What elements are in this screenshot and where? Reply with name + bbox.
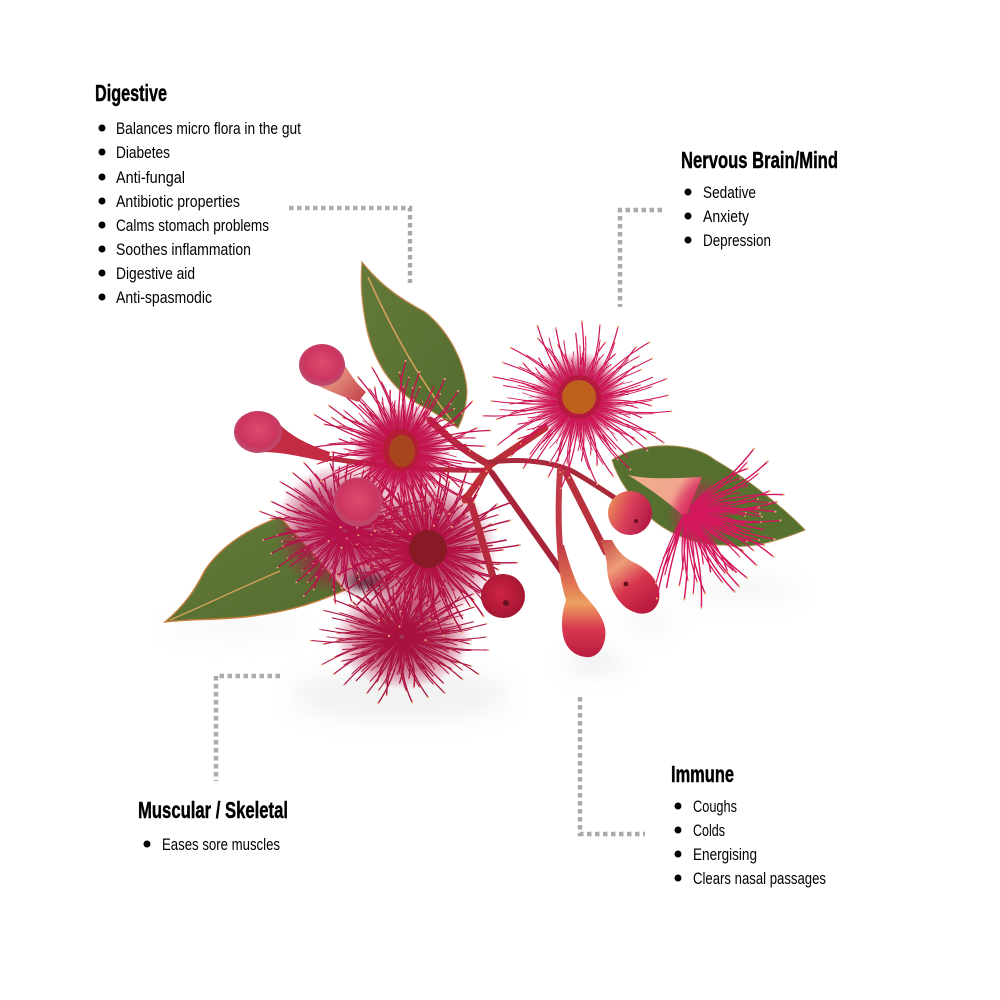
heading: immune: Immune (671, 761, 734, 787)
list: digestive: Soothes inflammation (116, 240, 251, 259)
panel: immune (671, 761, 826, 888)
panel: muscular (138, 797, 288, 854)
bud: lower right (600, 540, 659, 614)
flower: bottom (286, 552, 502, 717)
bud: top (299, 344, 366, 402)
connector: digestive (289, 208, 410, 283)
list: immune (674, 797, 826, 888)
list: digestive: Balances micro flora in the gut (116, 119, 301, 138)
connector: immune (580, 697, 645, 834)
list: digestive: Anti-spasmodic (116, 288, 212, 307)
list: digestive: Calms stomach problems (116, 216, 269, 235)
leaf: right (612, 446, 805, 546)
flower: right side with cone (624, 444, 812, 636)
list: immune: Clears nasal passages (693, 869, 826, 888)
bud: round centre (334, 478, 382, 526)
list: muscular: Eases sore muscles (162, 835, 280, 854)
list: nervous (684, 183, 771, 250)
list: immune: Energising (693, 845, 757, 864)
list: nervous: Depression (703, 231, 771, 250)
bud: right small (608, 491, 652, 535)
bud: lower centre (481, 574, 525, 618)
heading: digestive: Digestive (95, 80, 167, 106)
list: digestive (98, 119, 301, 307)
connector: muscular (216, 676, 280, 781)
list: nervous: Sedative (703, 183, 756, 202)
list: digestive: Diabetes (116, 143, 170, 162)
panel: digestive (95, 80, 301, 307)
list: digestive: Antibiotic properties (116, 192, 240, 211)
list: immune: Colds (693, 821, 725, 840)
panel: nervous (681, 147, 838, 250)
heading: nervous: Nervous Brain/Mind (681, 147, 838, 173)
illustration: eucalyptus flower sprig (165, 262, 812, 721)
connector: nervous (620, 210, 662, 307)
flower: upper right (448, 287, 693, 514)
soft shadow (165, 578, 800, 721)
leaf: left (165, 517, 345, 622)
list: immune: Coughs (693, 797, 737, 816)
flower: left (215, 409, 462, 642)
leaf: top (361, 262, 467, 428)
bud: left (234, 411, 330, 462)
bud: bottom (557, 545, 605, 657)
list: muscular (144, 835, 280, 854)
heading: muscular: Muscular / Skeletal (138, 797, 288, 823)
list: nervous: Anxiety (703, 207, 749, 226)
flower: upper middle (250, 300, 540, 587)
list: digestive: Digestive aid (116, 264, 195, 283)
flower: centre (288, 418, 550, 673)
list: digestive: Anti-fungal (116, 168, 185, 187)
shadow gap between flowers (346, 573, 390, 591)
stems (320, 420, 615, 580)
